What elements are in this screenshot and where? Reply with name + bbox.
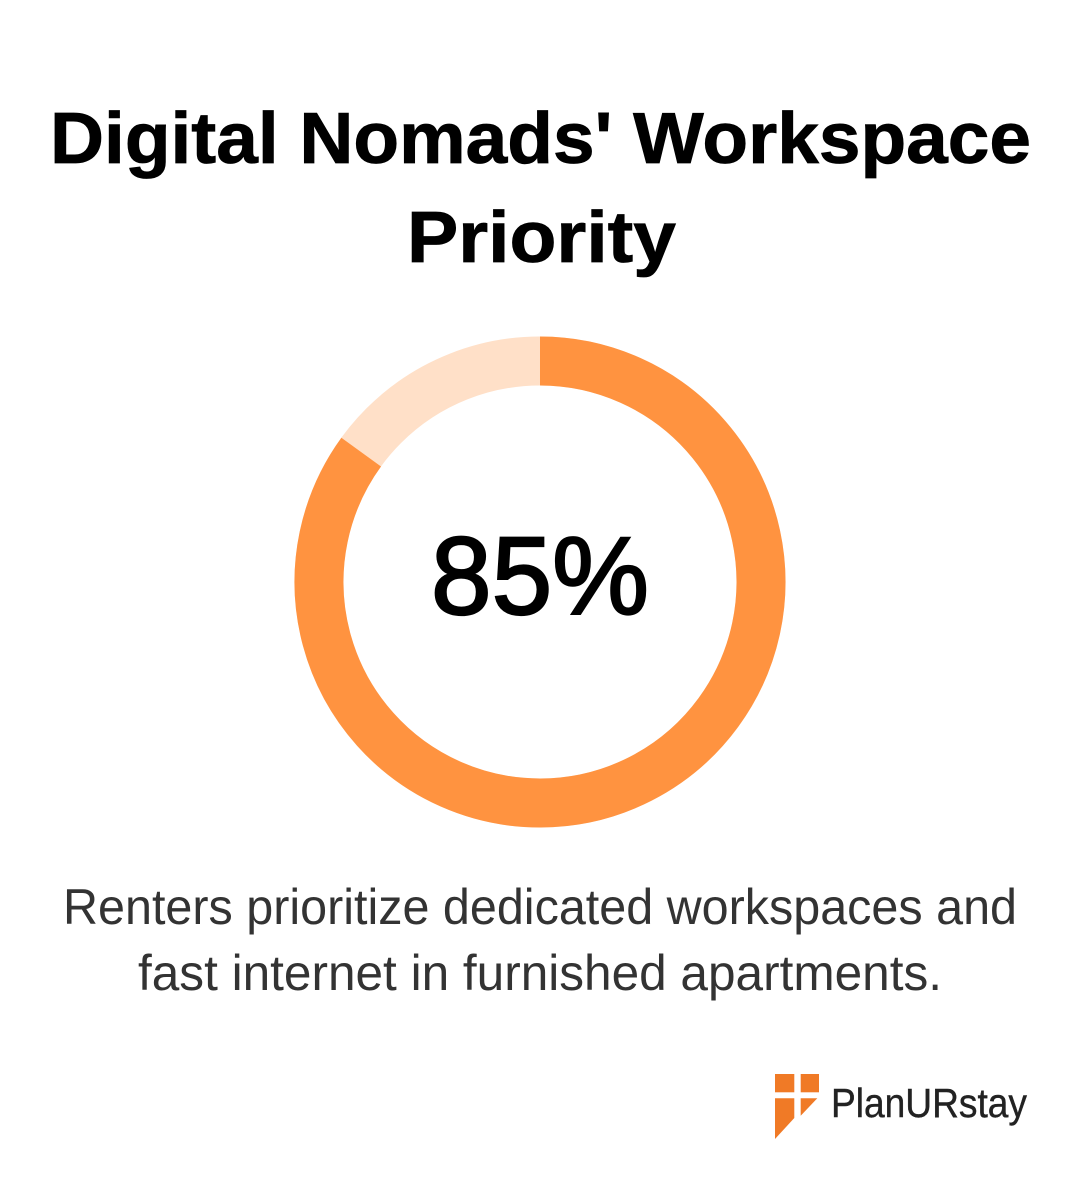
donut value segment: [319, 361, 761, 803]
caption text: fast internet in furnished apartments.: [138, 945, 942, 1001]
donut remainder segment: [319, 361, 761, 803]
logo: PlanURstay: [775, 1074, 1027, 1139]
title: Digital Nomads' Workspace: [50, 99, 1031, 179]
donut chart: 85%: [319, 361, 761, 803]
donut center value: 85%: [431, 515, 649, 638]
caption text: Renters prioritize dedicated workspaces and: [63, 879, 1017, 935]
caption text: [63, 879, 1017, 1001]
icon: orange house mark: [775, 1074, 819, 1139]
title: [50, 99, 1031, 278]
title: Priority: [407, 198, 676, 278]
logo wordmark: PlanURstay: [831, 1080, 1027, 1126]
